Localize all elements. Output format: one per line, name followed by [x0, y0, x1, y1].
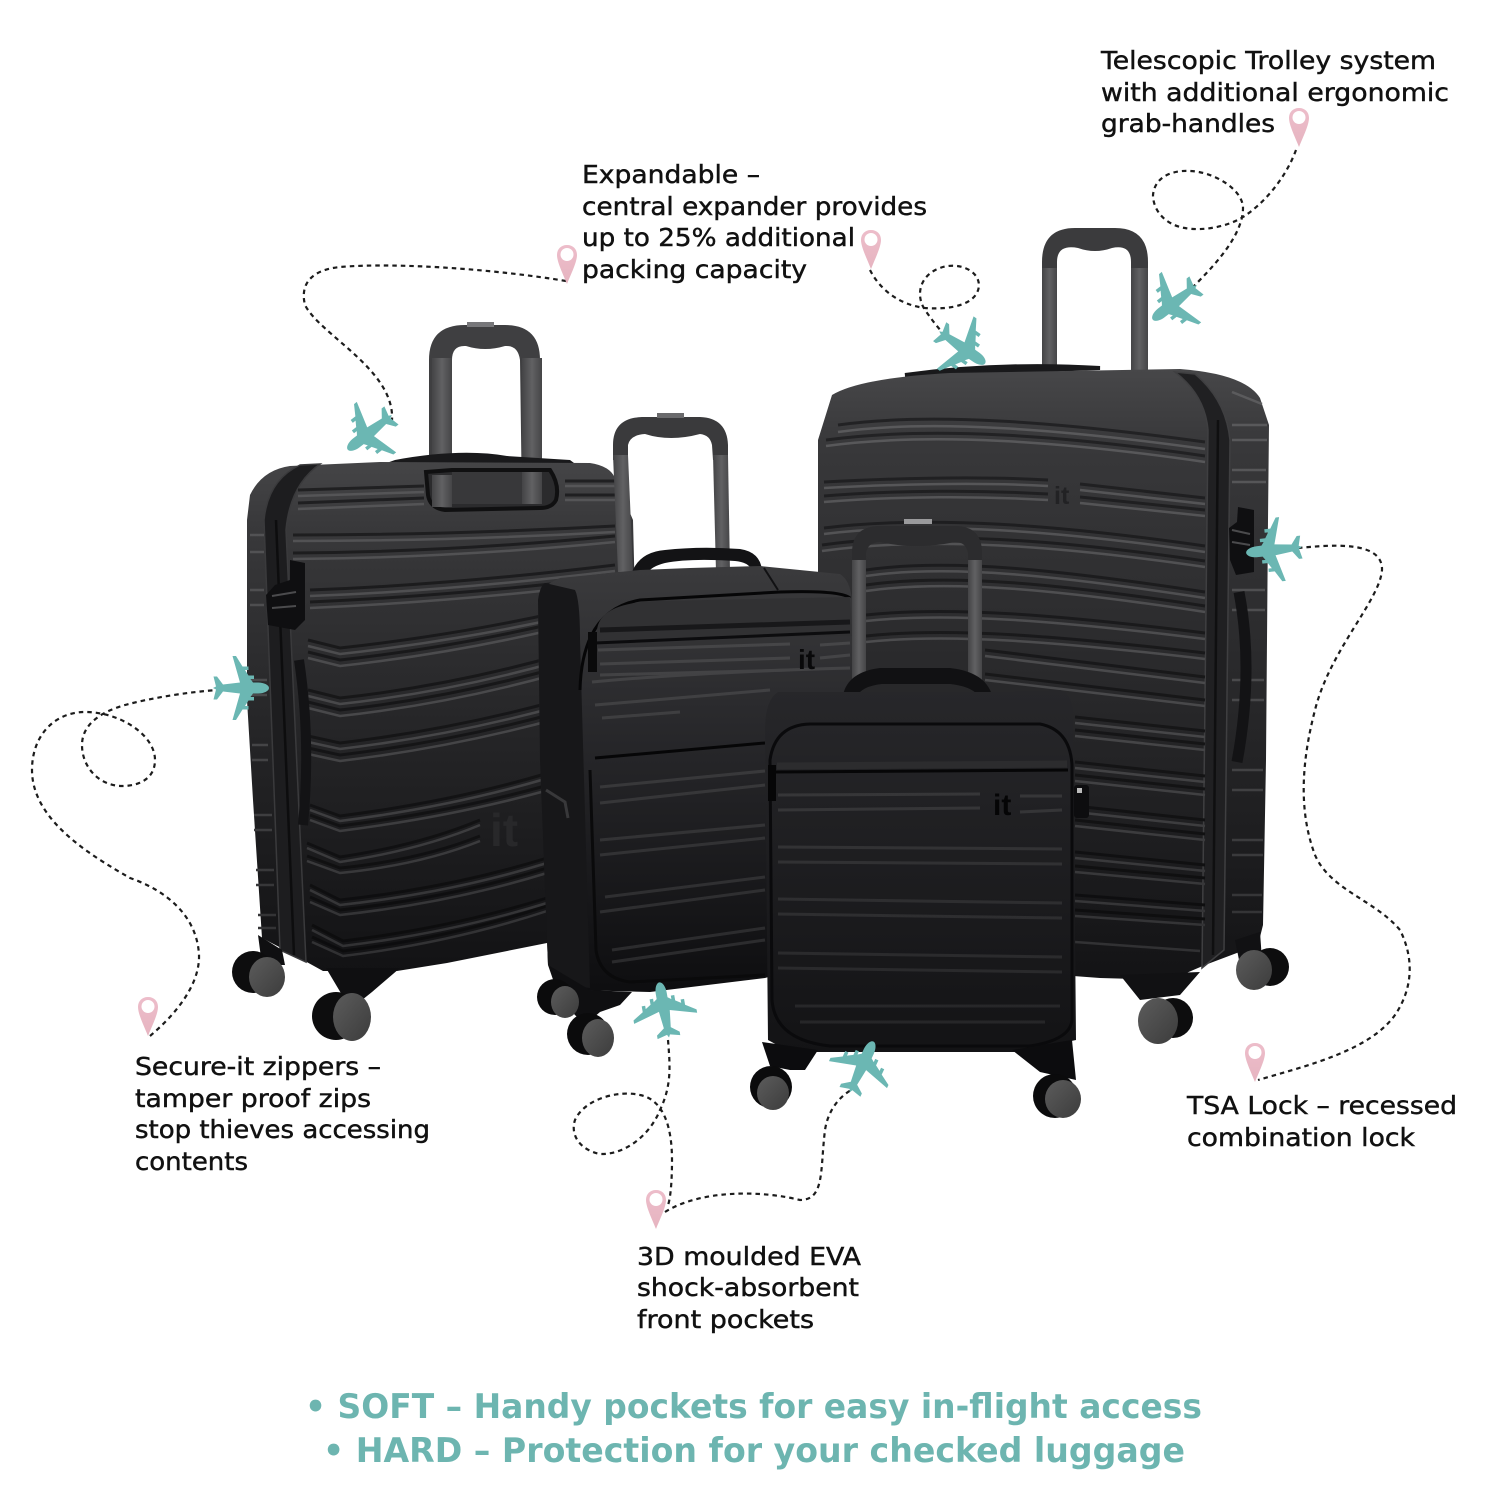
- icon: pin telescopic: [1289, 108, 1309, 147]
- icon: pin expandable right: [861, 230, 881, 269]
- brand mark: it: [1054, 482, 1070, 510]
- callout: telescopic trolley: Telescopic Trolley system: [1100, 46, 1436, 75]
- icon: pin secure-it: [138, 997, 158, 1036]
- suitcase: large hard case, left: [232, 322, 636, 1041]
- telescopic handle: [852, 519, 982, 680]
- suitcase: large hard case, right: [818, 228, 1289, 1044]
- heading: soft and hard summary: [305, 1387, 1202, 1471]
- side grab handle: [1237, 592, 1246, 762]
- callout: secure-it zippers: stop thieves accessing: [135, 1115, 430, 1144]
- icon: plane bottom right: [821, 1028, 902, 1106]
- callout: expandable: up to 25% additional: [582, 223, 855, 252]
- telescopic handle: [613, 413, 730, 572]
- callout: TSA lock: [1186, 1091, 1457, 1152]
- grab handle: [632, 548, 762, 574]
- top strap seam: [764, 568, 778, 590]
- suitcase: medium soft case, centre: [537, 413, 862, 1057]
- callout: TSA lock: TSA Lock – recessed: [1186, 1091, 1457, 1120]
- icon: plane right side: [1243, 515, 1305, 585]
- grab handle: [843, 668, 992, 697]
- side grab handle: [299, 660, 306, 825]
- icon: plane top left: [328, 390, 412, 475]
- callout: secure-it zippers: Secure-it zippers –: [135, 1052, 381, 1081]
- zipper band: [264, 464, 320, 962]
- zip lock: [1074, 785, 1089, 818]
- callout: 3D moulded EVA: 3D moulded EVA: [637, 1242, 861, 1271]
- icon: pin TSA: [1245, 1043, 1265, 1082]
- icon: plane top right: [1133, 260, 1217, 345]
- heading: soft and hard summary: • HARD – Protection for your checked luggage: [323, 1431, 1185, 1471]
- suitcase: small soft case, front: [750, 519, 1089, 1118]
- callout: expandable: [582, 160, 927, 284]
- icon: plane centre top: [921, 305, 1003, 390]
- handle recess: [426, 470, 557, 510]
- icon: plane left side: [213, 656, 269, 720]
- wheels: [537, 965, 632, 1057]
- telescopic handle: [429, 322, 542, 508]
- icon: pin EVA: [646, 1190, 666, 1229]
- route: TSA lock callout to plane: [1258, 546, 1410, 1080]
- wheels: [232, 935, 400, 1041]
- route: EVA pocket plane two to pin: [665, 1088, 855, 1212]
- route: expandable callout to plane: [870, 266, 979, 335]
- wheels: [1120, 932, 1289, 1044]
- icon: pin expandable left: [557, 245, 577, 284]
- callout: secure-it zippers: [135, 1052, 430, 1176]
- callout: 3D moulded EVA: [637, 1242, 861, 1334]
- combination lock: [1229, 507, 1254, 575]
- icon: plane bottom centre: [628, 977, 701, 1043]
- callout: secure-it zippers: tamper proof zips: [135, 1084, 371, 1113]
- callout: TSA lock: combination lock: [1187, 1123, 1416, 1152]
- wheels: [750, 1040, 1081, 1118]
- side panel: [538, 583, 590, 988]
- route: trolley callout to plane: [1153, 150, 1296, 287]
- route: zipper top callout to plane: [304, 265, 566, 420]
- callout: expandable: packing capacity: [582, 255, 807, 284]
- route: EVA pocket plane one to pin: [574, 1040, 672, 1205]
- callout: expandable: Expandable –: [582, 160, 760, 189]
- route: secure-it callout to plane: [32, 690, 217, 1036]
- callout: secure-it zippers: contents: [135, 1147, 248, 1176]
- combination lock: [266, 560, 305, 630]
- lower pocket outline: [590, 770, 765, 982]
- callout: telescopic trolley: [1100, 46, 1449, 138]
- callout: 3D moulded EVA: front pockets: [637, 1305, 814, 1334]
- zipper band: [1175, 372, 1230, 968]
- heading: soft and hard summary: • SOFT – Handy pockets for easy in-flight access: [305, 1387, 1202, 1427]
- callout: 3D moulded EVA: shock-absorbent: [637, 1273, 859, 1302]
- callout: telescopic trolley: with additional ergonomic: [1101, 78, 1449, 107]
- callout: expandable: central expander provides: [582, 192, 927, 221]
- telescopic handle: [1042, 228, 1148, 370]
- callout: telescopic trolley: grab-handles: [1101, 109, 1275, 138]
- brand mark: it: [993, 789, 1011, 822]
- brand mark: it: [490, 804, 518, 856]
- brand mark: it: [798, 644, 815, 675]
